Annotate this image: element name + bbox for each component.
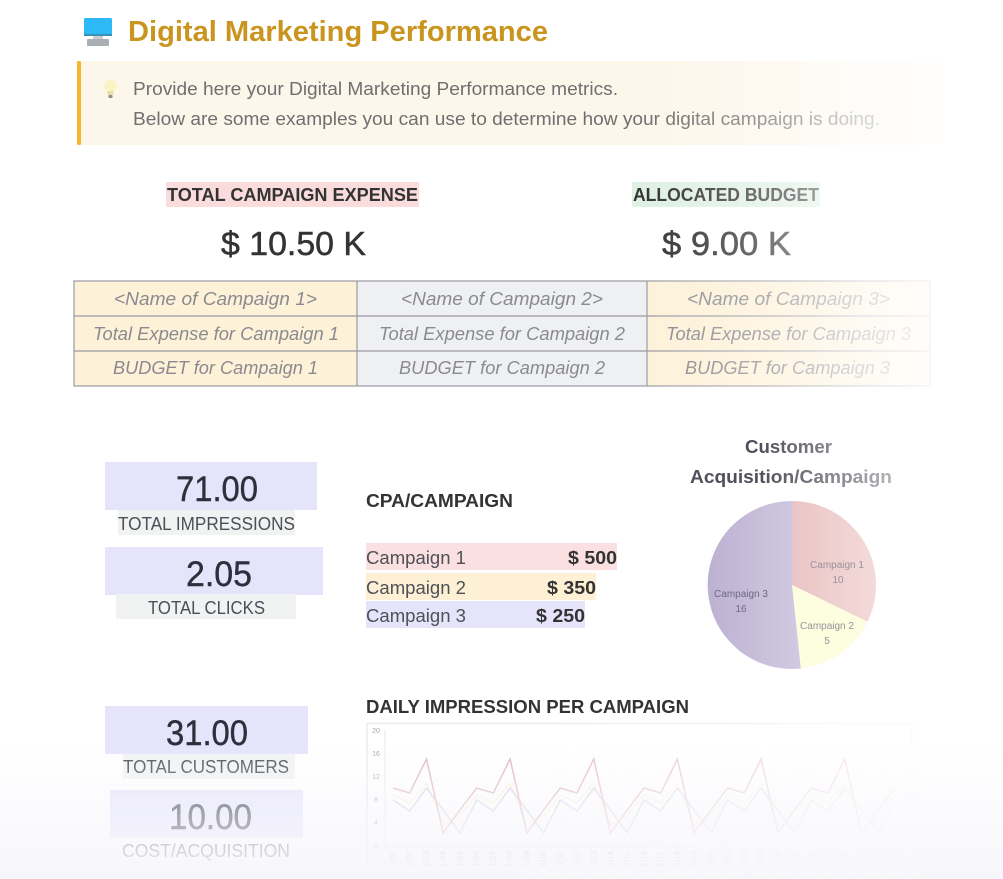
pie chart: Campaign 2 [800,621,854,632]
line chart: 1/10 [539,850,548,867]
campaign table: BUDGET for Campaign 1 [113,358,318,378]
callout text: Below are some examples you can use to determine how your digital campaign is doing. [133,109,880,129]
kpi: total impressions [105,462,317,535]
line chart: 0 [374,844,378,851]
line chart: 1/16 [640,850,648,867]
cpa per campaign: Campaign 2 [366,578,466,598]
cpa per campaign: $ 500 [568,548,617,568]
line chart: 1/23 [757,850,766,867]
line chart: 1/21 [723,850,732,867]
kpi: total impressions: 71.00 [176,470,258,509]
heading: cpa: CPA/CAMPAIGN [366,491,513,511]
line chart: 1/04 [439,850,448,867]
pie chart heading [690,437,892,487]
kpi: cost per acquisition: COST/ACQUISITION [122,841,290,861]
cpa per campaign: $ 250 [536,606,585,626]
line chart: 1/03 [422,850,431,867]
line chart: 1/25 [790,850,799,867]
line chart [367,724,912,867]
campaign table: <Name of Campaign 2> [401,289,603,309]
pie chart: Campaign 3 [714,589,768,600]
callout text [133,79,880,129]
line chart: 1/08 [506,850,515,867]
line chart: 1/29 [857,850,866,867]
pie chart: 10 [832,575,844,586]
line chart: 1/12 [572,850,582,867]
line chart: 1/15 [623,850,632,867]
kpi: total clicks: 2.05 [186,555,252,594]
allocated budget: ALLOCATED BUDGET [633,185,819,205]
line chart: 1/31 [890,850,899,867]
line chart: 1/20 [706,850,715,867]
total campaign expense: TOTAL CAMPAIGN EXPENSE [167,185,418,205]
panel: callout [77,61,945,145]
kpi: total clicks: TOTAL CLICKS [148,598,265,618]
line chart: 1/05 [455,850,464,867]
total campaign expense: $ 10.50 K [221,225,366,262]
cpa per campaign: Campaign 3 [366,606,466,626]
campaign table: BUDGET for Campaign 2 [399,358,605,378]
line chart: 4 [374,820,378,827]
line chart: 1/17 [656,850,665,867]
line chart: 1/18 [673,850,682,867]
line chart: 16 [372,751,380,758]
line chart: 1/28 [840,850,849,867]
line chart: 1/26 [807,850,816,867]
pie chart heading: Customer [745,437,832,457]
line chart: 1/01 [388,850,398,867]
line chart: 1/19 [690,850,699,867]
cpa per campaign: Campaign 1 [366,548,466,568]
kpi: total clicks [105,547,323,619]
allocated budget [632,182,820,262]
campaign table: Total Expense for Campaign 3 [666,324,911,344]
line chart: 1/24 [773,850,782,867]
campaign table: BUDGET for Campaign 3 [685,358,890,378]
kpi: total customers: 31.00 [166,714,248,753]
allocated budget: $ 9.00 K [662,225,791,262]
campaign table: Total Expense for Campaign 1 [93,324,339,344]
kpi: total customers: TOTAL CUSTOMERS [123,757,289,777]
line chart: 1/22 [740,850,749,867]
line chart: 1/30 [874,850,883,867]
pie chart [708,501,876,669]
line chart: 1/09 [522,850,531,867]
campaign table: Total Expense for Campaign 2 [379,324,625,344]
pie chart: Campaign 1 [810,560,864,571]
heading: daily impression: DAILY IMPRESSION PER CAMPAIGN [366,697,689,717]
line chart: 12 [372,774,380,781]
line chart: 8 [374,797,378,804]
line chart: 1/14 [606,850,615,867]
kpi: cost per acquisition [110,790,303,861]
icon: light bulb [104,80,116,98]
line chart: 1/07 [489,850,498,867]
cpa per campaign: $ 350 [547,578,596,598]
kpi: cost per acquisition: 10.00 [169,798,252,837]
pie chart: 16 [735,604,747,615]
line chart: 1/02 [405,850,414,867]
kpi: total customers [105,706,308,779]
line chart: 1/11 [556,850,565,866]
total campaign expense [166,182,419,262]
line chart: 1/06 [472,850,481,867]
campaign table: <Name of Campaign 3> [687,289,890,309]
cpa per campaign [366,491,617,628]
campaign table [74,281,930,386]
pie chart: 5 [824,636,830,647]
kpi: total impressions: TOTAL IMPRESSIONS [118,514,295,534]
line chart: 20 [372,728,380,735]
pie chart heading: Acquisition/Campaign [690,467,892,487]
title: Digital Marketing Performance [128,16,548,48]
icon: computer monitor [84,18,112,46]
line chart: 1/27 [824,850,832,867]
campaign table: <Name of Campaign 1> [114,289,317,309]
line chart: 1/13 [589,850,598,867]
callout text: Provide here your Digital Marketing Performance metrics. [133,79,618,99]
